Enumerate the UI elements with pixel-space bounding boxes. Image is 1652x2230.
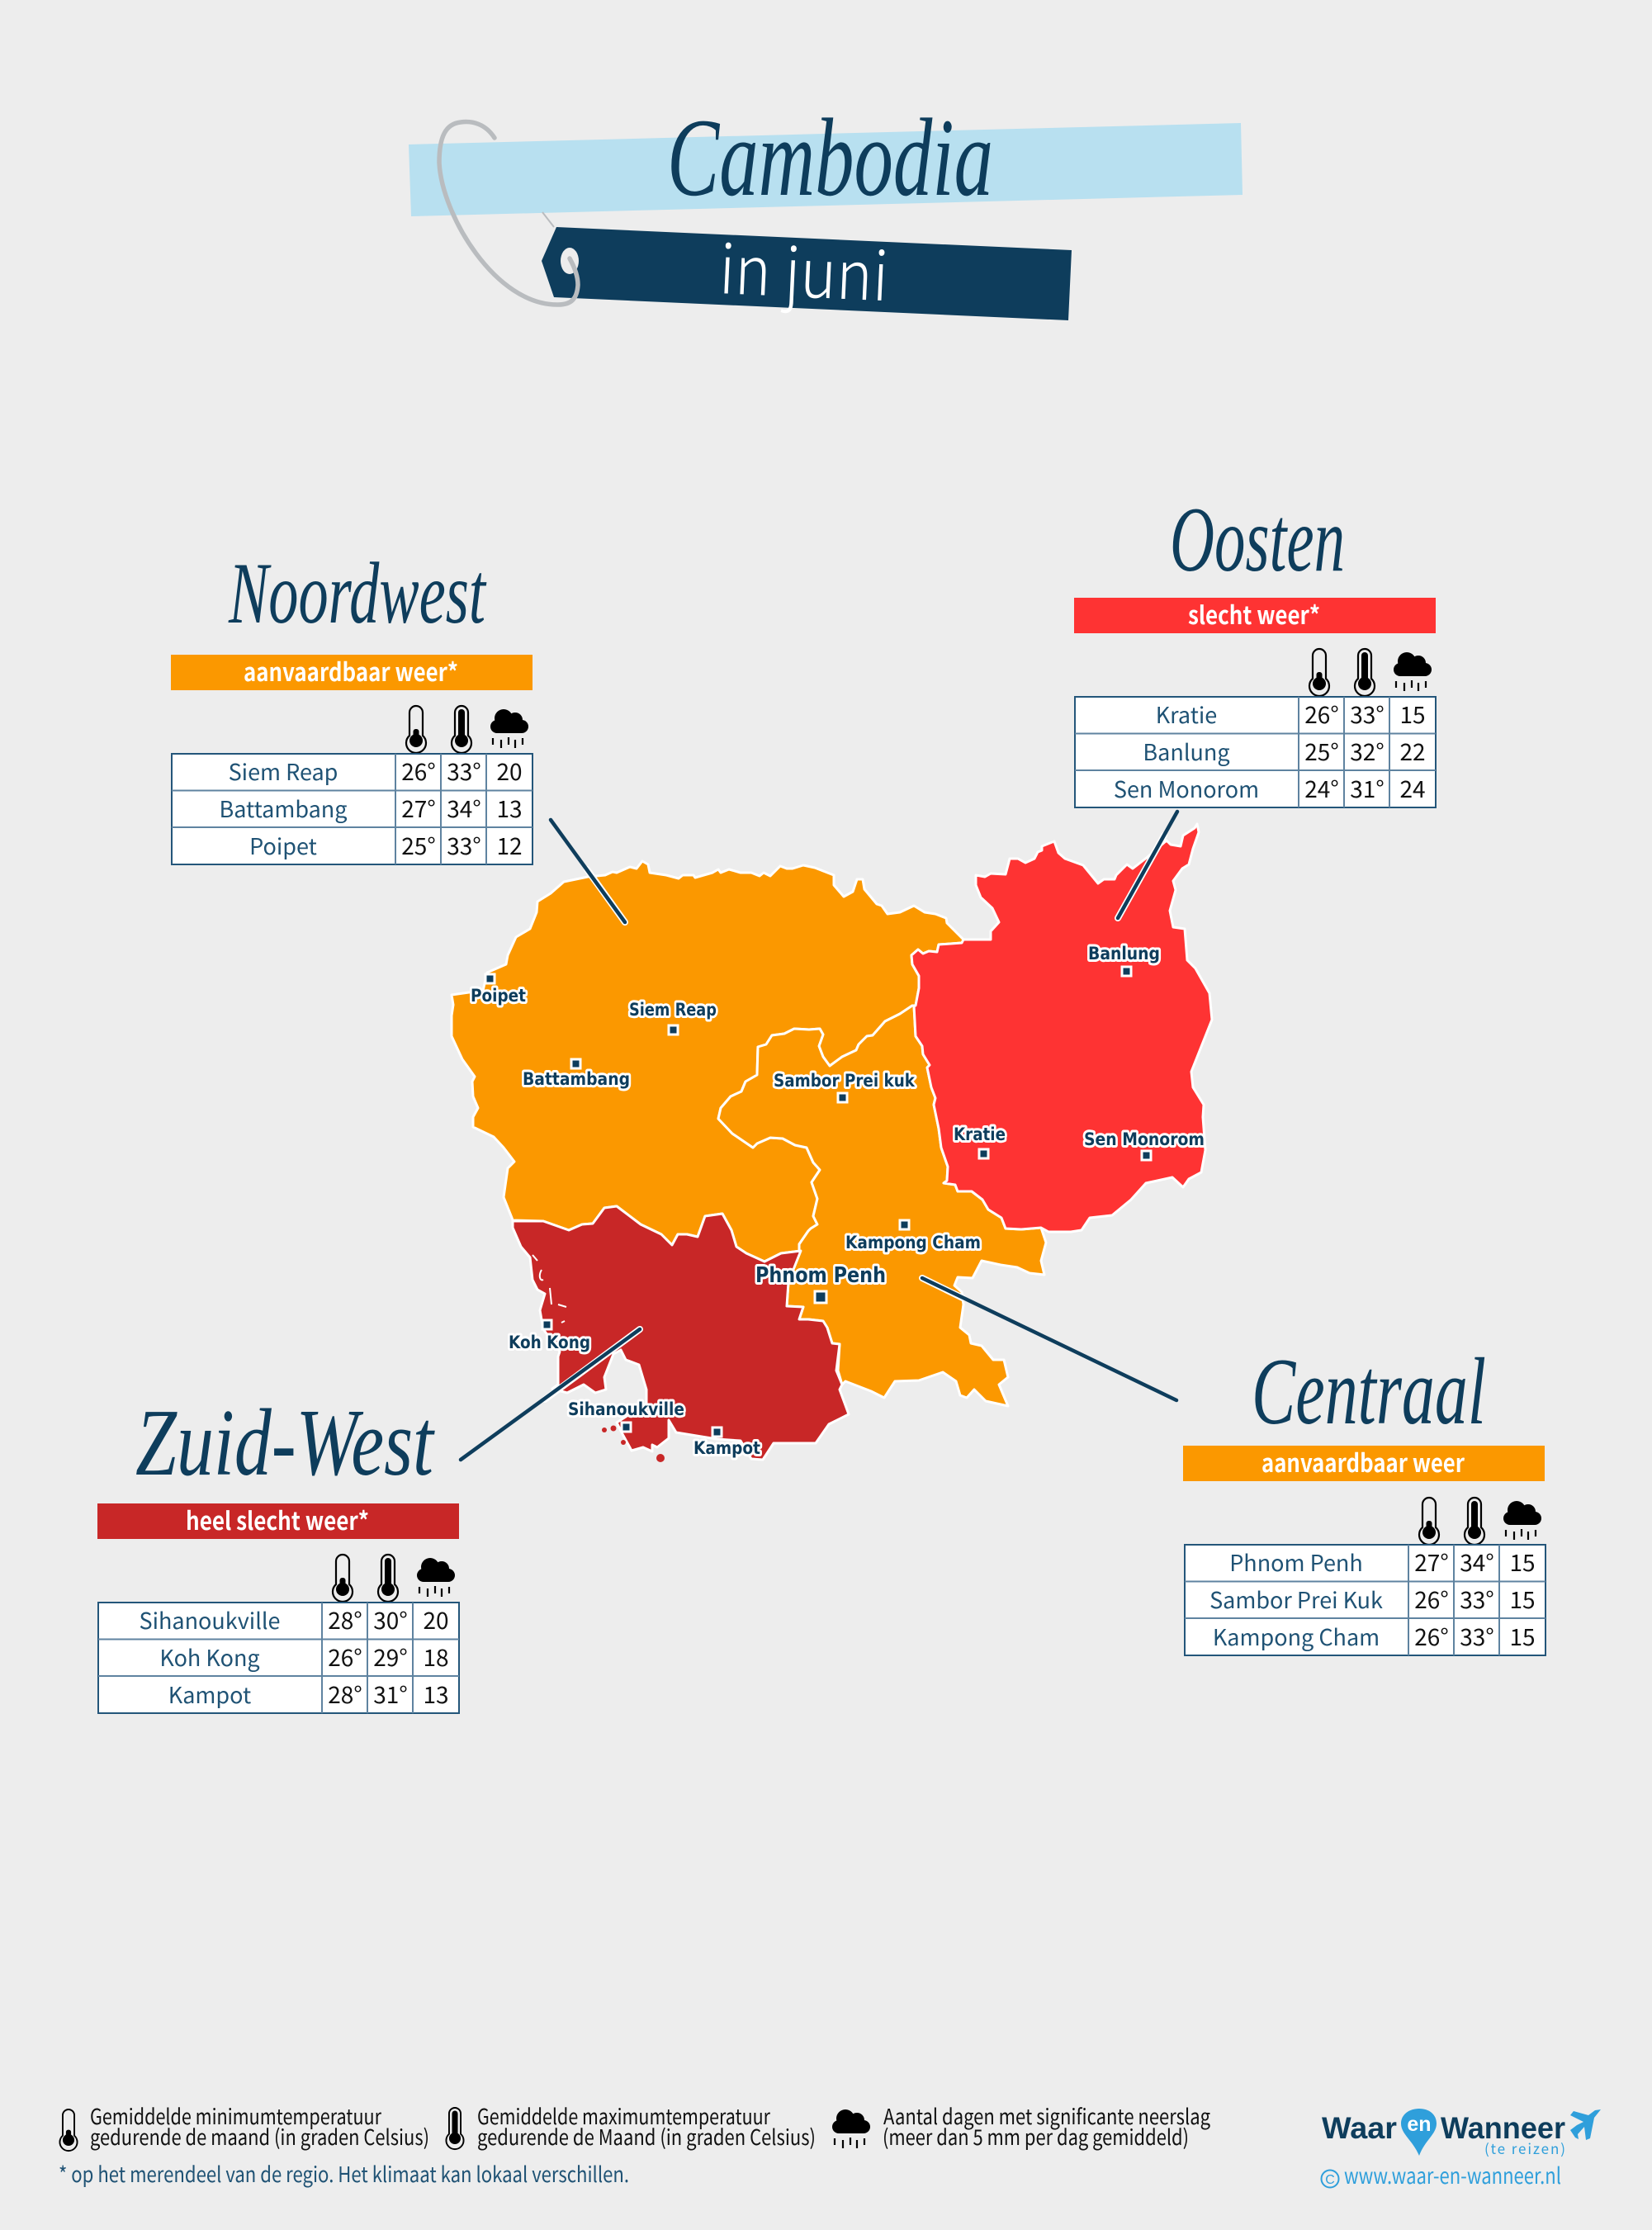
icon: rain cloud xyxy=(1394,652,1432,691)
icon: minimum temperature xyxy=(333,1555,353,1602)
icon: maximum temperature xyxy=(452,706,471,753)
legend text: rain days xyxy=(883,2100,1210,2152)
city marker: Battambang: Battambang xyxy=(523,1069,630,1089)
city marker: Siem Reap xyxy=(629,1000,717,1035)
legend text: maximum temperature: Gemiddelde maximumtemperatuur xyxy=(477,2100,771,2131)
city marker: Koh Kong xyxy=(509,1320,590,1352)
table: 29° xyxy=(373,1641,408,1674)
table: Kampong Cham xyxy=(1213,1620,1380,1652)
icon: maximum temperature xyxy=(1465,1498,1484,1545)
panel: Noordwest xyxy=(171,545,533,864)
title band xyxy=(409,123,1243,216)
table: 24 xyxy=(1399,772,1426,805)
city marker: Sihanoukville: Sihanoukville xyxy=(568,1399,684,1419)
table xyxy=(1075,697,1436,807)
panel: Oosten xyxy=(1074,489,1436,807)
city marker: Poipet: Poipet xyxy=(471,986,526,1006)
table: Sen Monorom xyxy=(1114,772,1259,804)
panel: Zuid-West xyxy=(97,1390,459,1713)
region: Zuid-West xyxy=(513,1206,849,1462)
table xyxy=(1185,1545,1545,1655)
city marker: Poipet xyxy=(471,974,526,1006)
logo: Waar en Wanneer: Wanneer xyxy=(1441,2111,1565,2145)
legend text: minimum temperature xyxy=(90,2100,429,2152)
footnote: * op het merendeel van de regio. Het klimaat kan lokaal verschillen. xyxy=(59,2158,629,2189)
rating banner xyxy=(171,652,533,690)
table: 34° xyxy=(447,792,481,825)
legend icon: maximum temperature xyxy=(446,2108,464,2149)
rating banner xyxy=(1183,1443,1545,1481)
copyright and website: C xyxy=(1325,2173,1335,2187)
icon: map pin xyxy=(1401,2109,1437,2156)
table: 27° xyxy=(1414,1546,1449,1579)
rating banner: heel slecht weer* xyxy=(186,1501,369,1537)
table: 20 xyxy=(496,755,523,788)
icon: rain cloud xyxy=(1503,1501,1541,1540)
legend icon: minimum temperature xyxy=(59,2109,78,2151)
city marker: Banlung: Banlung xyxy=(1088,944,1160,963)
city marker: Kampot: Kampot xyxy=(693,1438,760,1458)
table xyxy=(172,754,533,864)
city marker: Battambang xyxy=(523,1059,630,1089)
table: Kampot xyxy=(168,1678,251,1710)
heading: Centraal: Centraal xyxy=(1252,1339,1486,1445)
table: 33° xyxy=(1460,1620,1494,1653)
subtitle: in juni: in juni xyxy=(717,215,891,320)
table: Banlung xyxy=(1143,735,1230,767)
legend text: minimum temperature: Gemiddelde minimumtemperatuur xyxy=(90,2100,382,2131)
table: Kratie xyxy=(1156,698,1217,730)
table: 28° xyxy=(328,1603,362,1636)
city marker: Sambor Prei kuk: Sambor Prei kuk xyxy=(774,1071,916,1091)
region: Oosten xyxy=(911,824,1212,1232)
city marker: Banlung xyxy=(1088,944,1160,976)
city marker: Phnom Penh: Phnom Penh xyxy=(755,1263,886,1288)
copyright and website: www.waar-en-wanneer.nl xyxy=(1344,2158,1561,2190)
city marker: Kampot xyxy=(693,1427,760,1458)
rating banner: aanvaardbaar weer* xyxy=(244,652,458,689)
icon: minimum temperature xyxy=(1309,649,1329,696)
table: 25° xyxy=(401,829,436,862)
table: Poipet xyxy=(249,829,317,861)
table: 18 xyxy=(423,1641,449,1674)
legend xyxy=(59,2100,1210,2189)
city marker: Kratie xyxy=(954,1124,1006,1158)
table xyxy=(98,1603,459,1713)
legend text: minimum temperature: gedurende de maand (in graden Celsius) xyxy=(90,2121,429,2152)
legend text: maximum temperature: gedurende de Maand (in graden Celsius) xyxy=(477,2121,816,2152)
table: Battambang xyxy=(219,792,348,824)
city marker: Phnom Penh xyxy=(755,1263,886,1303)
panel: Centraal xyxy=(1183,1339,1545,1655)
city marker: Sihanoukville xyxy=(568,1399,684,1432)
city marker: Kratie: Kratie xyxy=(954,1124,1006,1144)
table: 32° xyxy=(1350,735,1385,768)
legend text: maximum temperature xyxy=(477,2100,816,2152)
legend text: rain days: Aantal dagen met significante neerslag xyxy=(883,2100,1210,2131)
table: Sihanoukville xyxy=(139,1603,281,1636)
table: 26° xyxy=(1414,1583,1449,1616)
pointer line: Noordwest xyxy=(551,820,625,922)
city marker: Sen Monorom: Sen Monorom xyxy=(1084,1129,1205,1149)
rating banner xyxy=(1074,595,1436,633)
table: 15 xyxy=(1509,1546,1536,1579)
table: 34° xyxy=(1460,1546,1494,1579)
table: 31° xyxy=(1350,772,1385,805)
map of Cambodia xyxy=(452,812,1212,1462)
rating banner xyxy=(97,1501,459,1539)
table: 20 xyxy=(423,1603,449,1636)
table: 26° xyxy=(1414,1620,1449,1653)
logo: Waar en Wanneer: (te reizen) xyxy=(1484,2138,1565,2158)
table: 25° xyxy=(1304,735,1339,768)
table: 30° xyxy=(373,1603,408,1636)
icon: rain cloud xyxy=(490,709,528,748)
table: 15 xyxy=(1399,698,1426,731)
table: 33° xyxy=(1350,698,1385,731)
heading: Zuid-West: Zuid-West xyxy=(135,1390,435,1496)
heading: Oosten: Oosten xyxy=(1170,489,1345,591)
table: 26° xyxy=(1304,698,1339,731)
city marker: Siem Reap: Siem Reap xyxy=(629,1000,717,1020)
city marker: Kampong Cham: Kampong Cham xyxy=(845,1233,981,1252)
table: 15 xyxy=(1509,1620,1536,1653)
city marker: Sen Monorom xyxy=(1084,1129,1205,1160)
table: Sambor Prei Kuk xyxy=(1209,1583,1383,1615)
icon: maximum temperature xyxy=(1355,649,1375,696)
table: Phnom Penh xyxy=(1229,1546,1363,1578)
table: 15 xyxy=(1509,1583,1536,1616)
rating banner: slecht weer* xyxy=(1188,595,1320,632)
title: Cambodia: Cambodia xyxy=(667,97,993,220)
table: Koh Kong xyxy=(159,1641,260,1673)
table: 31° xyxy=(373,1678,408,1711)
icon: maximum temperature xyxy=(378,1555,398,1602)
legend icon: rain cloud xyxy=(832,2109,870,2148)
table: 27° xyxy=(401,792,436,825)
pointer line: Zuid-West xyxy=(461,1329,640,1460)
label tag xyxy=(542,212,1072,320)
legend text: rain days: (meer dan 5 mm per dag gemiddeld) xyxy=(883,2121,1189,2152)
heading: Noordwest: Noordwest xyxy=(228,545,487,642)
rating banner: aanvaardbaar weer xyxy=(1261,1443,1465,1480)
table: 13 xyxy=(423,1678,449,1711)
table: Siem Reap xyxy=(229,755,338,787)
icon: minimum temperature xyxy=(1419,1498,1439,1545)
icon: map pin: en xyxy=(1407,2113,1432,2136)
table: 22 xyxy=(1399,735,1426,768)
logo: Waar en Wanneer: Waar xyxy=(1322,2111,1397,2145)
table: 33° xyxy=(1460,1583,1494,1616)
table: 28° xyxy=(328,1678,362,1711)
table: 26° xyxy=(328,1641,362,1674)
table: 26° xyxy=(401,755,436,788)
icon: minimum temperature xyxy=(406,706,426,753)
logo: Waar en Wanneer xyxy=(1321,2109,1601,2190)
region: Noordwest xyxy=(452,861,963,1262)
table: 12 xyxy=(496,829,523,862)
table: 33° xyxy=(447,755,481,788)
pointer line: Centraal xyxy=(922,1278,1176,1400)
icon: rain cloud xyxy=(417,1558,455,1597)
region: Centraal xyxy=(718,1006,1046,1406)
table: 33° xyxy=(447,829,481,862)
city marker: Kampong Cham xyxy=(845,1220,981,1252)
tag string ring xyxy=(439,122,578,305)
table: 24° xyxy=(1304,772,1339,805)
city marker: Sambor Prei kuk xyxy=(774,1071,916,1102)
icon: airplane xyxy=(1570,2109,1601,2140)
city marker: Koh Kong: Koh Kong xyxy=(509,1333,590,1352)
pointer line: Oosten xyxy=(1118,812,1177,918)
title block xyxy=(409,97,1243,320)
table: 13 xyxy=(496,792,523,825)
